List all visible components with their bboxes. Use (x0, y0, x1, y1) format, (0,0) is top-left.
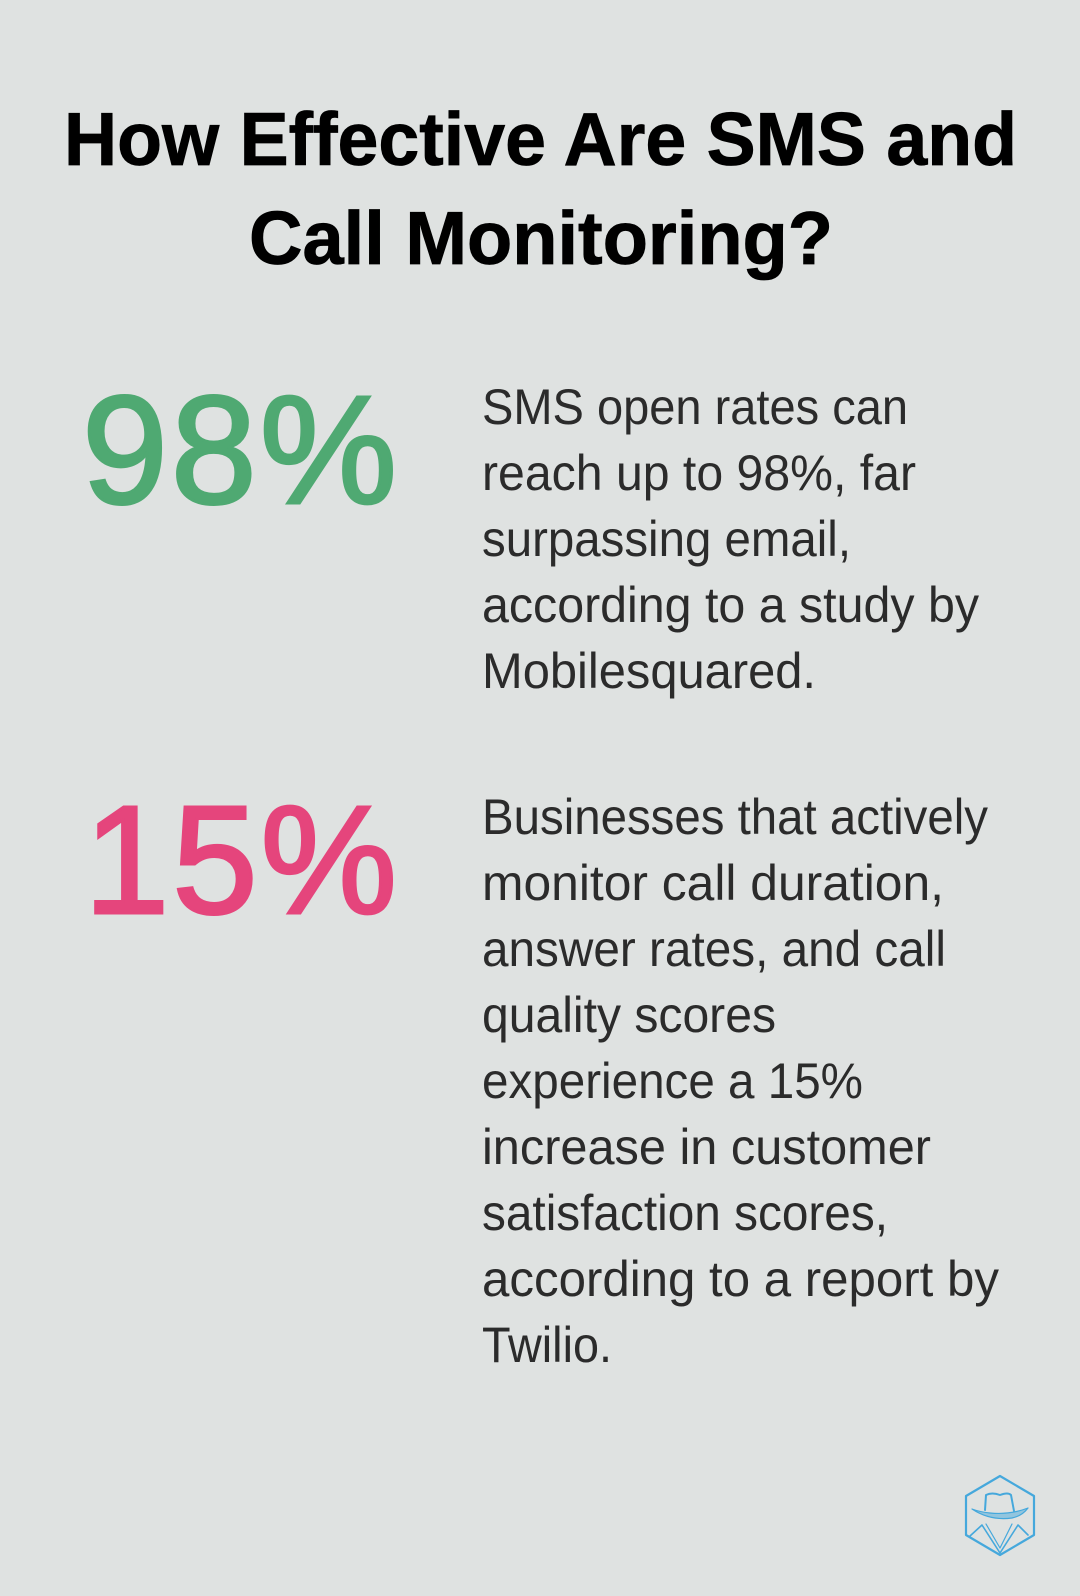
text block: businesses monitoring calls: satisfaction scores, (482, 1185, 888, 1241)
text block: businesses monitoring calls: according to a report by (482, 1251, 999, 1307)
text block: businesses monitoring calls: monitor call duration, (482, 855, 944, 911)
text block: SMS open rates: surpassing email, (482, 511, 851, 567)
text block: SMS open rates: Mobilesquared. (482, 643, 816, 699)
icon: logo hexagon with hat (966, 1476, 1034, 1555)
title: Call Monitoring? (249, 196, 833, 280)
stat: 98%: 98% (82, 364, 400, 536)
title (64, 97, 1017, 280)
text block: businesses monitoring calls: Twilio. (482, 1317, 612, 1373)
text block: businesses monitoring calls: experience a 15% (482, 1053, 863, 1109)
text block: businesses monitoring calls: quality scores (482, 987, 776, 1043)
text block: businesses monitoring calls: increase in customer (482, 1119, 931, 1175)
text block: businesses monitoring calls: answer rates, and call (482, 921, 946, 977)
title: How Effective Are SMS and (64, 97, 1017, 181)
text block: businesses monitoring calls (482, 789, 999, 1373)
text block: SMS open rates (482, 379, 979, 699)
stat: 15%: 15% (84, 774, 400, 946)
text block: SMS open rates: reach up to 98%, far (482, 445, 916, 501)
text block: businesses monitoring calls: Businesses that actively (482, 789, 988, 845)
text block: SMS open rates: SMS open rates can (482, 379, 908, 435)
text block: SMS open rates: according to a study by (482, 577, 979, 633)
